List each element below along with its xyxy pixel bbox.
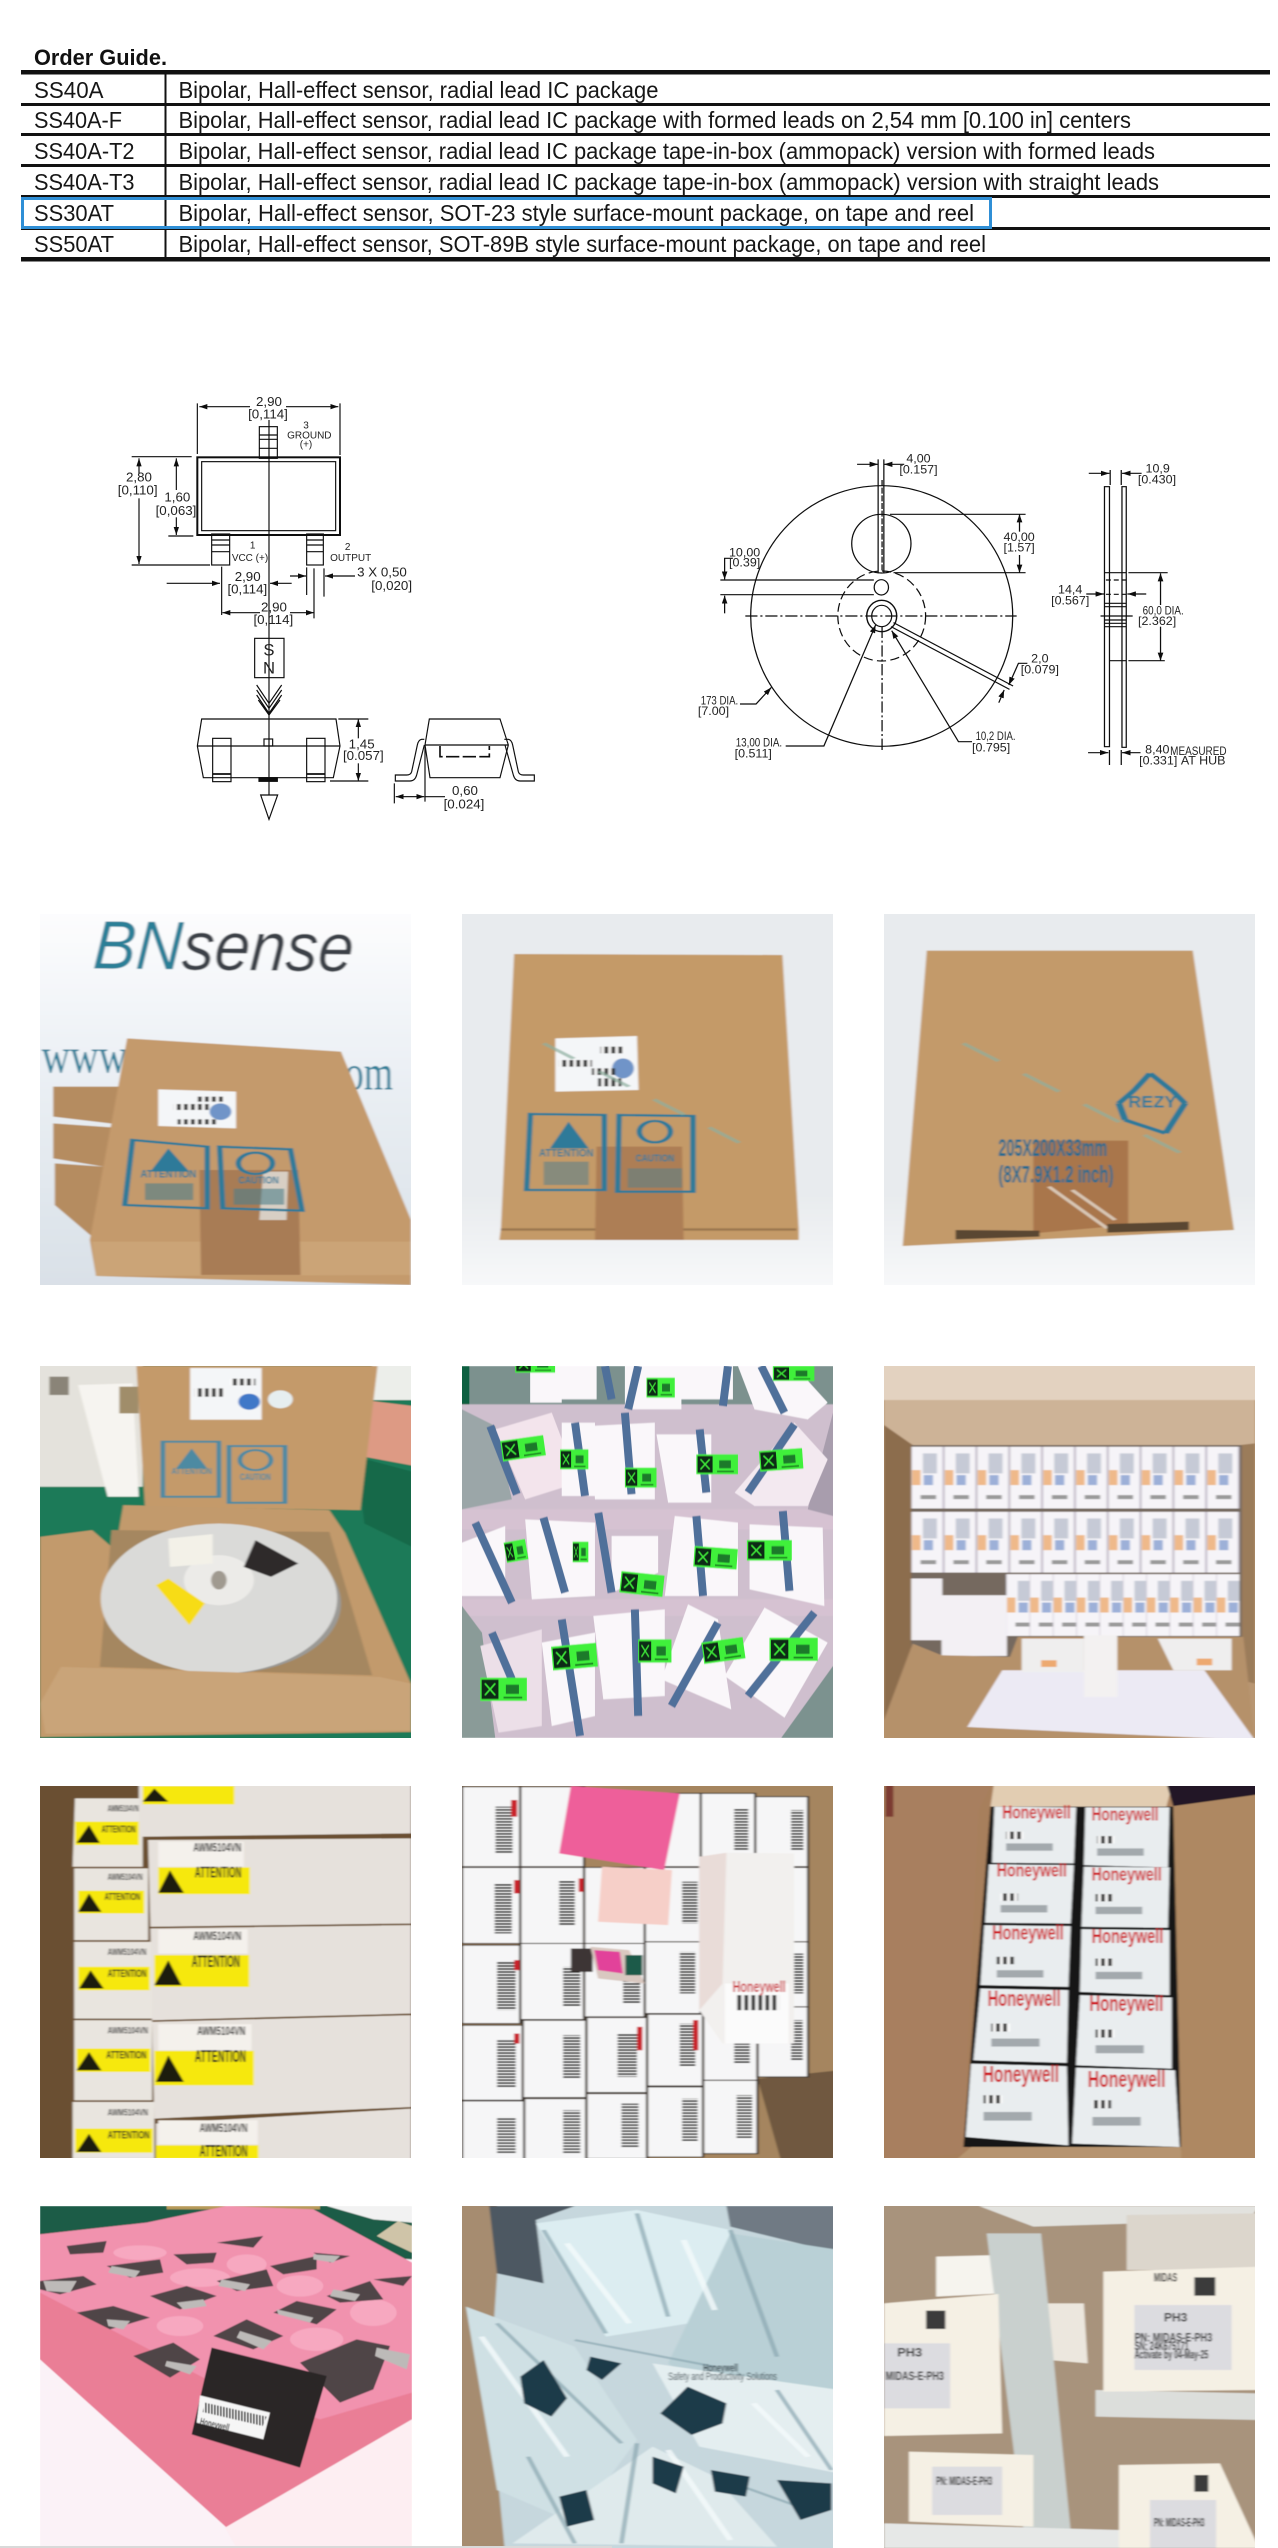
photo: long white boxes with yellow labels (40, 1786, 411, 2160)
yellow attention labels (75, 1786, 259, 2159)
tape and reel dimension drawing: [0.567] (1051, 594, 1089, 607)
tape and reel dimension drawing: AT HUB (1181, 754, 1226, 767)
ESD caution label: CAUTION (238, 1174, 279, 1186)
dimensions print (998, 1135, 1113, 1188)
black device (192, 2348, 327, 2468)
unit text: MIDAS-E-PH3 (886, 2369, 944, 2383)
photo: device on pink foam (40, 2206, 412, 2546)
SOT-23 package dimension drawing: 3 (303, 420, 309, 431)
photo: carton with BNsense logo (40, 907, 411, 1285)
tape and reel dimension drawing: 10,9 (1146, 462, 1170, 475)
photo: long white boxes with yellow labels: AWM5104VN (193, 1841, 241, 1855)
tape and reel dimension drawing: [0.39] (729, 556, 760, 570)
SOT-23 package dimension drawing: VCC (+) (232, 553, 268, 564)
Honeywell wordmarks (983, 1802, 1166, 2092)
order guide table: SS40A (34, 77, 104, 103)
photo: long white boxes with yellow labels: AWM5104VN (199, 2121, 248, 2135)
label text: ATTENTION (105, 1891, 140, 1902)
tape and reel dimension drawing: [7.00] (698, 704, 729, 718)
SOT-23 package dimension drawing: 3 X 0,50 (357, 565, 407, 580)
unit text: PN: MIDAS-E-PH3 (936, 2474, 992, 2488)
SOT-23 package dimension drawing: GROUND (287, 430, 332, 441)
sensor units (884, 2267, 1259, 2548)
slots (956, 1230, 1040, 1239)
order guide table: Bipolar, Hall-effect sensor, radial lead IC package tape-in-box (ammopack) version with straight leads (178, 169, 1159, 195)
tape (595, 1147, 684, 1240)
green labels (480, 1356, 818, 1701)
ESD attention label (125, 1140, 207, 1208)
order guide table: SS50AT (34, 231, 114, 257)
photo: long white boxes with yellow labels: AWM5104VN (197, 2025, 245, 2038)
barcodes (495, 1807, 803, 2154)
label text: ATTENTION (108, 2130, 150, 2141)
photo: long white boxes with yellow labels: ATTENTION (199, 2142, 248, 2160)
SOT-23 package dimension drawing: 2,90 (261, 600, 287, 615)
Honeywell wordmarks: Honeywell (987, 1987, 1061, 2011)
SOT-23 package dimension drawing: [0,114] (253, 612, 293, 627)
black device: Honeywell (199, 2417, 230, 2434)
bottom scrollbar edge (0, 2546, 612, 2548)
order guide table: SS40A-T2 (34, 138, 134, 164)
recycling symbol (1119, 1073, 1185, 1133)
tape and reel dimension drawing: 13,00 DIA. (736, 736, 782, 750)
tape and reel dimension drawing: [0.511] (735, 747, 772, 760)
photo: carton with BNsense logo: ATTENTION (140, 1168, 196, 1180)
photo: small boxes packed in carton (884, 1366, 1255, 1738)
tape and reel dimension drawing: [1.57] (1004, 541, 1035, 555)
SOT-23 package dimension drawing: [0,110] (118, 482, 158, 497)
label (158, 1089, 236, 1128)
order guide table: Bipolar, Hall-effect sensor, SOT-89B style surface-mount package, on tape and reel (178, 231, 986, 257)
tape and reel dimension drawing (698, 452, 1227, 767)
photo: long white boxes with yellow labels: AWM5104VN (108, 2107, 148, 2118)
box rows (911, 1447, 1239, 1656)
tape and reel dimension drawing: 2,0 (1031, 652, 1049, 665)
bag print: Honeywell (703, 2363, 738, 2374)
ESD caution label: CAUTION (635, 1153, 674, 1164)
blue strips (475, 1366, 814, 1736)
recycling symbol: REZY (1128, 1093, 1176, 1111)
photo: long white boxes with yellow labels: ATTENTION (192, 1952, 240, 1971)
order guide table: SS40A-T3 (34, 169, 134, 195)
SOT-23 package dimension drawing: [0,063] (156, 503, 196, 518)
order guide table: Bipolar, Hall-effect sensor, radial lead IC package tape-in-box (ammopack) version with formed leads (178, 138, 1155, 164)
tape and reel dimension drawing: [0.795] (972, 741, 1010, 754)
photo: reel in open carton: CAUTION (240, 1472, 271, 1482)
SOT-23 package dimension drawing: OUTPUT (330, 553, 371, 564)
photo: carton back (884, 914, 1255, 1283)
right column boxes (139, 1780, 411, 2160)
tape and reel dimension drawing: 60,0 DIA. (1143, 604, 1184, 617)
reel (101, 1523, 341, 1674)
Honeywell wordmarks: Honeywell (997, 1861, 1067, 1881)
tape and reel dimension drawing: 14,4 (1058, 583, 1083, 596)
tape and reel dimension drawing: 173 DIA. (701, 694, 738, 707)
photo: long white boxes with yellow labels: AWM5104VN (108, 1803, 139, 1814)
tape and reel dimension drawing: 10,00 (729, 546, 761, 560)
photo: Honeywell boxes with barcodes and pink foam (462, 1786, 833, 2158)
photo: Honeywell boxes in open carton (884, 1786, 1255, 2158)
photo: long white boxes with yellow labels: AWM5104VN (193, 1930, 241, 1943)
photo: long white boxes with yellow labels: AWM5104VN (108, 2025, 148, 2036)
label (555, 1036, 639, 1092)
SOT-23 package dimension drawing: [0,114] (248, 406, 288, 421)
ESD attention label (527, 1114, 604, 1190)
foam highlights (113, 2245, 397, 2351)
SOT-23 package dimension drawing: 2,80 (126, 470, 152, 485)
website text (42, 1029, 393, 1100)
Honeywell wordmarks: Honeywell (1002, 1802, 1071, 1823)
tape (199, 1170, 301, 1275)
highlight box around SS30AT row (22, 198, 990, 228)
label text: ATTENTION (106, 2050, 147, 2061)
photo: MIDAS gas sensor cartridges (884, 2206, 1255, 2548)
order guide section (21, 45, 1270, 262)
ESD caution label (220, 1147, 302, 1211)
unit text: MIDAS (1154, 2271, 1177, 2284)
SOT-23 package dimension drawing: [0.024] (444, 796, 484, 811)
order guide table: SS30AT (34, 200, 114, 226)
open carton lid (136, 1366, 378, 1510)
SOT-23 package dimension drawing (118, 394, 534, 819)
SOT-23 package dimension drawing: 1,45 (349, 736, 375, 751)
white box grid (462, 1787, 808, 2161)
label text (101, 1824, 248, 2160)
tape and reel dimension drawing: MEASURED (1170, 744, 1227, 758)
ESD caution label (618, 1115, 693, 1192)
tray (40, 1505, 411, 1737)
unit text: PH3 (1164, 2311, 1187, 2324)
tape and reel dimension drawing: [0.430] (1138, 473, 1176, 486)
red side marks (511, 1800, 698, 2050)
plastic creases (497, 2213, 831, 2543)
photo: sensors in plastic bags (462, 2206, 833, 2548)
SOT-23 package dimension drawing: [0,020] (371, 578, 412, 593)
SOT-23 package dimension drawing: N (263, 658, 275, 677)
tape and reel dimension drawing: 10,2 DIA. (976, 729, 1016, 743)
foam block (40, 2206, 412, 2528)
SOT-23 package dimension drawing: (+) (300, 440, 312, 451)
unit text (886, 2271, 1212, 2529)
Honeywell wordmarks: Honeywell (983, 2061, 1059, 2087)
photo: long white boxes with yellow labels: AWM5104VN (108, 1872, 143, 1882)
photo: bagged sensors with green labels (462, 1366, 833, 1738)
lid ESD marks: ATTENTION (171, 1467, 212, 1476)
order guide table: Bipolar, Hall-effect sensor, radial lead IC package with formed leads on 2,54 mm [0.100 in] centers (178, 107, 1131, 133)
white product cards (462, 1366, 828, 1733)
tape (1033, 1141, 1128, 1233)
order guide table: Bipolar, Hall-effect sensor, SOT-23 style surface-mount package, on tape and reel (178, 200, 974, 226)
tape and reel dimension drawing: [0.331] (1139, 754, 1177, 767)
order guide table: SS40A-F (34, 107, 122, 133)
lid ESD marks (163, 1442, 285, 1503)
tape and reel dimension drawing: [0.157] (899, 463, 938, 476)
small stacked box text (108, 1803, 148, 2118)
SOT-23 package dimension drawing: [0.057] (343, 748, 384, 763)
front flap (40, 1667, 411, 1734)
tape and reel dimension drawing: 8,40 (1145, 743, 1170, 756)
SOT-23 package dimension drawing: 0,60 (452, 783, 478, 798)
website text: www (42, 1029, 127, 1084)
SOT-23 package dimension drawing: 1,60 (164, 490, 190, 505)
label text: ATTENTION (108, 1968, 147, 1980)
foam pockets with parts (40, 2236, 412, 2403)
SOT-23 package dimension drawing: 1 (250, 540, 256, 551)
order guide table (21, 70, 1270, 262)
long Honeywell box (699, 1853, 794, 2044)
tape and reel dimension drawing: 4,00 (906, 452, 931, 466)
clear-wrap lower highlight (225, 2419, 412, 2548)
SOT-23 package dimension drawing: 2,90 (256, 394, 282, 409)
label text: ATTENTION (101, 1824, 136, 1835)
SOT-23 package dimension drawing: S (263, 641, 275, 660)
pink foam (559, 1786, 680, 1925)
cardboard floor (884, 1637, 1255, 1740)
photo: reel in open carton (40, 1366, 411, 1738)
Honeywell wordmarks: Honeywell (992, 1922, 1064, 1944)
Honeywell box grid (966, 1807, 1180, 2147)
sensor (571, 1947, 645, 1984)
photo: long white boxes with yellow labels: ATTENTION (195, 1863, 241, 1881)
left column boxes (73, 1798, 154, 2159)
dark sensors in bags (520, 2357, 831, 2527)
SOT-23 package dimension drawing: [0,114] (227, 581, 267, 596)
title: Order Guide. (34, 45, 167, 70)
tape and reel dimension drawing: [0.079] (1021, 663, 1059, 676)
unit text: PH3 (897, 2346, 922, 2359)
SOT-23 package dimension drawing: 2,90 (235, 569, 261, 584)
SOT-23 package dimension drawing: 2 (345, 542, 351, 553)
photo: long white boxes with yellow labels: AWM5104VN (108, 1947, 147, 1957)
photo: carton front: ATTENTION (539, 1148, 593, 1159)
bag print (668, 2363, 777, 2383)
photo: long white boxes with yellow labels: ATTENTION (195, 2046, 246, 2066)
tape and reel dimension drawing: [2.362] (1138, 614, 1176, 628)
tape and reel dimension drawing: 40,00 (1004, 530, 1035, 544)
order guide table: Bipolar, Hall-effect sensor, radial lead IC package (178, 77, 658, 103)
photo: carton front (462, 914, 833, 1283)
